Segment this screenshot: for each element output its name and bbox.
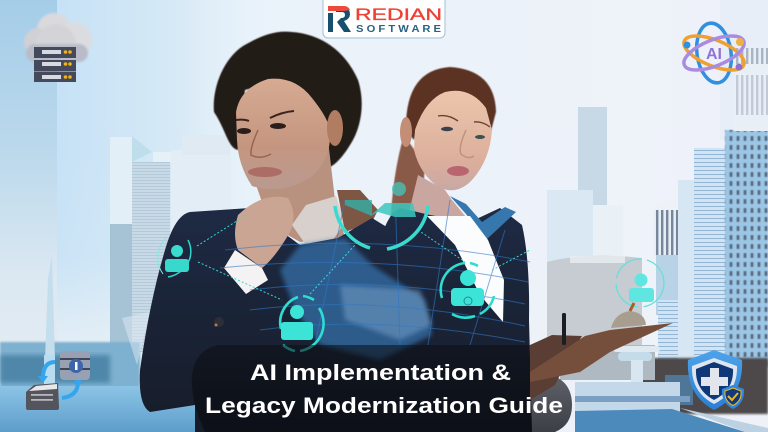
arrows: [43, 362, 78, 398]
network node icon: person top: [335, 182, 428, 249]
left city skyline: [0, 135, 231, 395]
clipboard and hand: [530, 303, 673, 400]
network node icon: person left: [158, 238, 191, 277]
logo: Redian Software: REDIAN: [355, 6, 442, 24]
water foreground: [0, 386, 200, 432]
icon: security shield: [688, 350, 744, 410]
brows and eyes: [236, 111, 294, 121]
brows and eyes: [438, 116, 490, 127]
title text: [205, 360, 563, 418]
ponytail: [390, 135, 425, 232]
suit body: [140, 208, 440, 432]
holographic map grid lines: [220, 190, 530, 345]
face: [414, 91, 492, 190]
network node icon: person far right: [616, 259, 664, 307]
pen: [562, 313, 566, 345]
icon: AI atom: [679, 21, 749, 85]
woman right: [368, 67, 532, 432]
neck: [408, 175, 470, 222]
suit: [368, 208, 532, 432]
hand: [235, 197, 294, 268]
button: [214, 317, 224, 327]
lapel: [450, 196, 516, 240]
icon: cloud server: [24, 13, 92, 82]
neck: [255, 140, 345, 242]
ear: [400, 117, 412, 147]
logo mark: [328, 6, 351, 32]
collar: [292, 196, 345, 248]
object on clipboard: [611, 311, 646, 328]
hair: [406, 67, 496, 140]
shirt cuff: [224, 250, 268, 294]
title band: [192, 345, 572, 432]
icon: data migration folder and database: [26, 351, 90, 410]
woman left: [140, 32, 440, 432]
right city skyline: [547, 45, 768, 432]
face: [236, 79, 330, 189]
network connector lines: [197, 214, 530, 300]
hair: [214, 32, 362, 168]
folder: [26, 383, 59, 410]
network node icon: person centre: [280, 296, 324, 351]
database: [60, 351, 90, 380]
title text: Legacy Modernization Guide: [205, 393, 563, 418]
jacket shoulder: [337, 190, 378, 232]
shirt: [427, 216, 504, 322]
clipboard: [530, 323, 673, 382]
network node icon: person right: [441, 263, 494, 318]
ear: [327, 110, 343, 146]
icon: AI atom: AI: [706, 46, 722, 63]
logo: Redian Software: S O F T W A R E: [356, 23, 441, 35]
title text: AI Implementation &: [250, 360, 511, 385]
hand and sleeve: [530, 335, 582, 400]
blue chest overlay: [280, 238, 432, 360]
logo: Redian Software: [323, 0, 445, 38]
